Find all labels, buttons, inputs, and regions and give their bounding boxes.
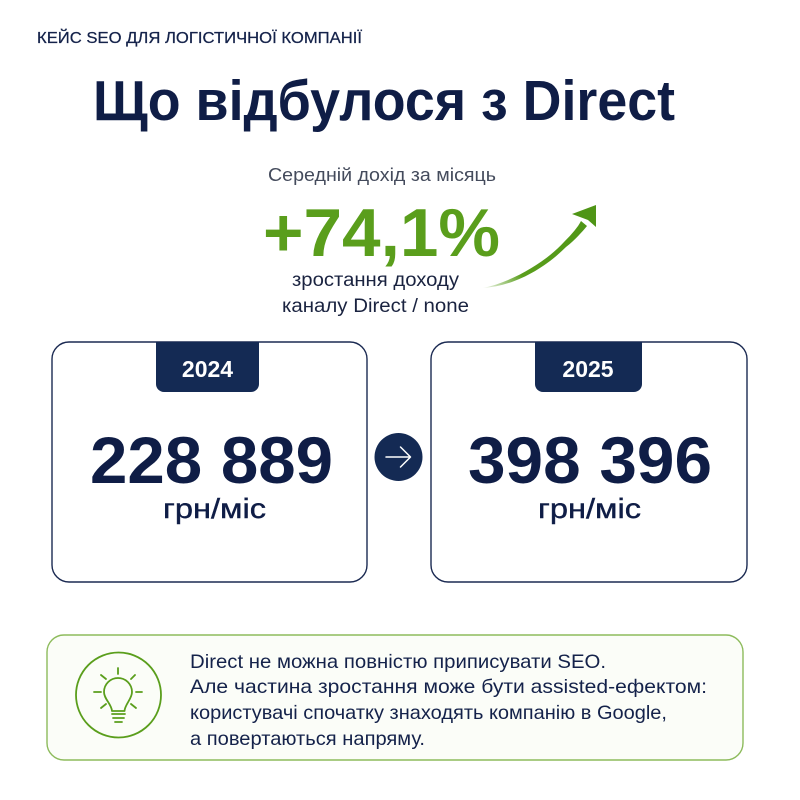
note text: Direct не можна повністю приписувати SEO. xyxy=(190,651,606,673)
year tab 2025: 2025 xyxy=(562,356,614,382)
unit 2024: грн/міс xyxy=(163,493,266,524)
year tab 2025 xyxy=(535,342,642,392)
kicker: КЕЙС SEO ДЛЯ ЛОГІСТИЧНОЇ КОМПАНІЇ xyxy=(37,28,363,47)
year tab 2024 xyxy=(156,342,259,392)
growth description: каналу Direct / none xyxy=(282,296,469,317)
unit 2025: грн/міс xyxy=(538,493,641,524)
panel: 2025 xyxy=(431,342,747,582)
growth percentage: +74,1% xyxy=(263,195,500,271)
note text: користувачі спочатку знаходять компанію в Google, xyxy=(190,702,667,724)
icon: growth arrow xyxy=(483,205,596,288)
note text: а повертаються напряму. xyxy=(190,728,425,750)
icon: arrow between years xyxy=(374,433,422,481)
panel: note xyxy=(47,635,743,760)
year tab 2024: 2024 xyxy=(182,356,233,382)
note text: Але частина зростання може бути assisted-ефектом: xyxy=(190,676,707,698)
note text xyxy=(190,651,707,750)
subtitle: Середній дохід за місяць xyxy=(268,164,496,185)
icon: light bulb xyxy=(76,652,161,738)
panel: 2024 xyxy=(52,342,367,582)
growth description xyxy=(282,270,469,317)
title: Що відбулося з Direct xyxy=(93,69,675,133)
value 2024: 228 889 xyxy=(90,423,333,497)
growth description: зростання доходу xyxy=(292,270,460,291)
value 2025: 398 396 xyxy=(468,423,712,497)
